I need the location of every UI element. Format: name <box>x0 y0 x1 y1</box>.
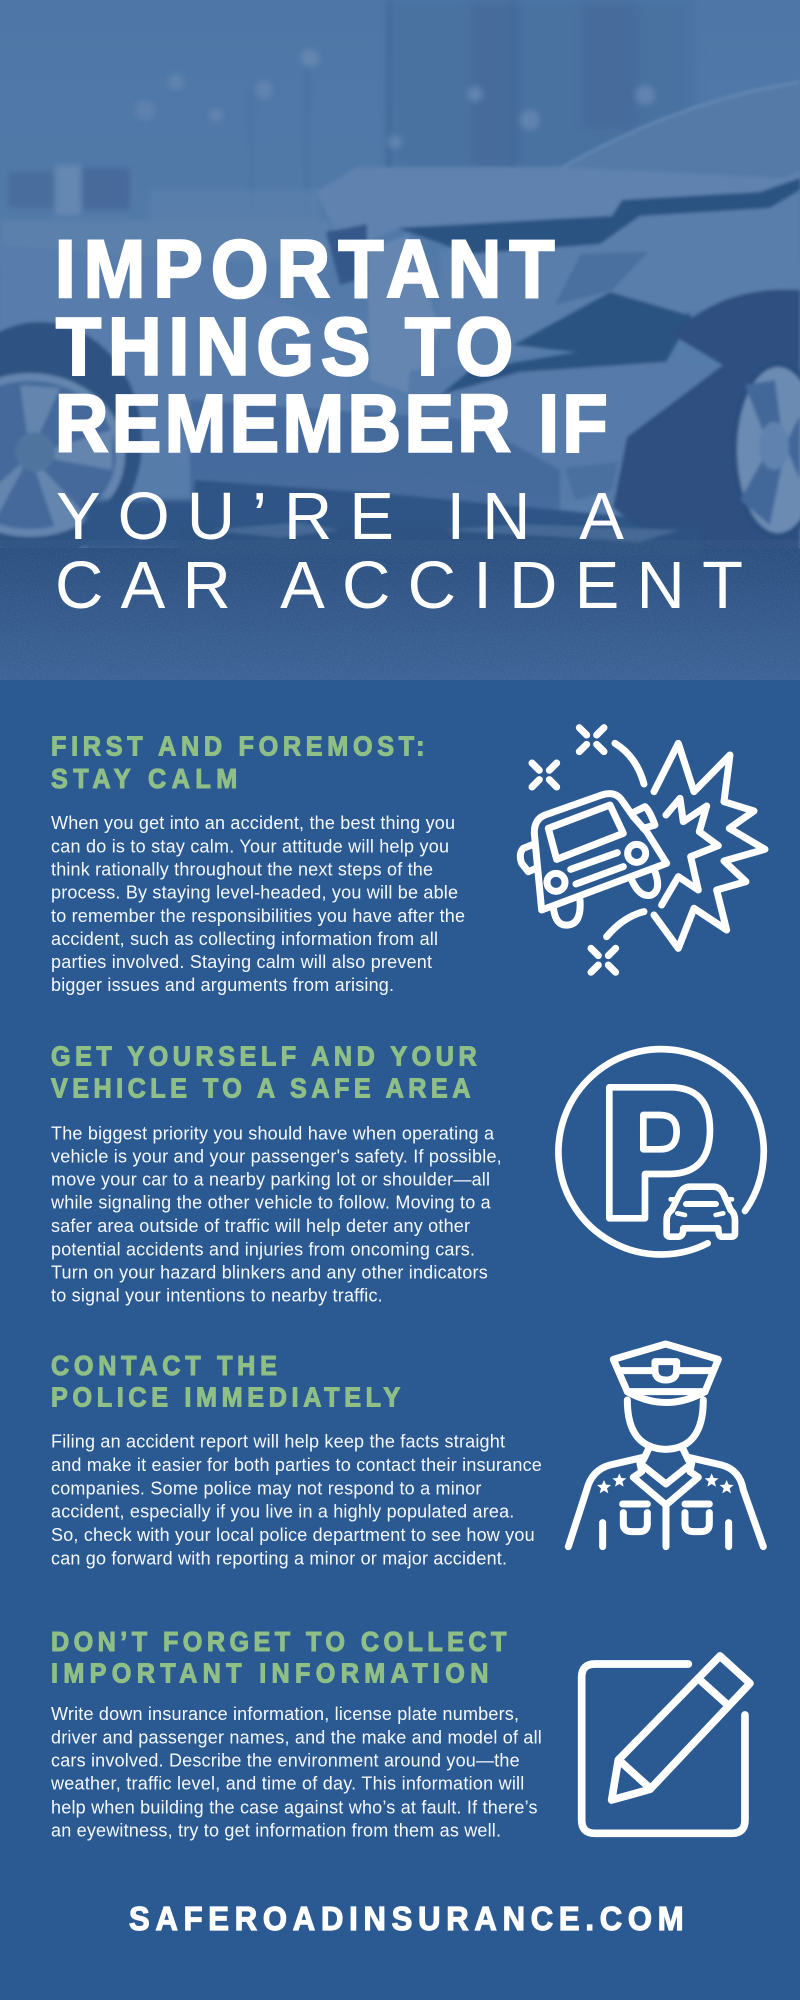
text block: stay calm: When you get into an accident, the best thing you <box>51 813 455 833</box>
right car front body <box>443 207 800 350</box>
text block: safe area: potential accidents and injuries from oncoming cars. <box>51 1239 475 1259</box>
text block: contact the police: accident, especially if you live in a highly populated area. <box>51 1501 514 1521</box>
title: light lines: YOU’RE IN A <box>56 479 624 554</box>
right car dark hood gap <box>398 178 800 254</box>
left car wheel arch and tyre <box>0 322 142 558</box>
heading: stay calm: STAY CALM <box>51 763 237 794</box>
right car wheel arch and tyre <box>613 290 800 572</box>
text block: stay calm: can do is to stay calm. Your attitude will help you <box>51 836 449 856</box>
heading: stay calm: FIRST AND FOREMOST: <box>51 730 425 762</box>
heading: safe area <box>51 1040 477 1104</box>
panel: collect information <box>50 1626 750 1841</box>
icon: police officer <box>568 1344 763 1547</box>
title: bold lines <box>55 222 608 469</box>
text block: contact the police: and make it easier for both parties to contact their insurance <box>51 1455 542 1475</box>
text block: stay calm: parties involved. Staying calm will also prevent <box>51 952 432 972</box>
text block: stay calm: process. By staying level-headed, you will be able <box>51 883 458 903</box>
text block: safe area: The biggest priority you should have when operating a <box>51 1123 495 1143</box>
heading: contact the police: CONTACT THE <box>51 1350 277 1381</box>
title: bold lines: IMPORTANT <box>55 222 555 315</box>
heading: safe area: GET YOURSELF AND YOUR <box>51 1040 477 1072</box>
text block: stay calm: to remember the responsibilities you have after the <box>51 906 465 926</box>
heading: collect information <box>51 1626 506 1689</box>
text block: stay calm: think rationally throughout the next steps of the <box>51 859 433 879</box>
road surface <box>85 500 205 550</box>
text block: collect information: cars involved. Describe the environment around you—the <box>51 1751 520 1771</box>
hero photo: blue-tinted car crash <box>0 0 800 680</box>
panel: safe area <box>50 1040 764 1305</box>
text block: contact the police: So, check with your local police department to see how you <box>51 1525 535 1545</box>
icon: car crash <box>520 728 765 972</box>
heading: contact the police: POLICE IMMEDIATELY <box>51 1381 400 1413</box>
heading: contact the police <box>51 1350 400 1413</box>
left car hood and body <box>3 320 132 384</box>
text block: contact the police: companies. Some police may not respond to a minor <box>51 1478 481 1498</box>
icon: pencil on notepad <box>582 1656 750 1833</box>
title: bold lines: THINGS TO <box>56 300 513 392</box>
icon: parking sign with car <box>558 1049 764 1254</box>
heading: safe area: VEHICLE TO A SAFE AREA <box>51 1072 470 1104</box>
text block: safe area: vehicle is your and your passenger's safety. If possible, <box>51 1146 502 1166</box>
text block: collect information: weather, traffic level, and time of day. This information will <box>50 1774 524 1794</box>
title: light lines <box>55 479 743 623</box>
heading: collect information: DON’T FORGET TO COLLECT <box>51 1626 506 1657</box>
text block: collect information: help when building the case against who’s at fault. If there’s <box>51 1797 538 1817</box>
text block: stay calm: accident, such as collecting information from all <box>51 929 438 949</box>
footer: website: SAFEROADINSURANCE.COM <box>129 1900 684 1937</box>
text block: safe area: safer area outside of traffic will help deter any other <box>51 1216 470 1236</box>
text block: collect information: driver and passenger names, and the make and model of all <box>51 1727 542 1747</box>
text block: safe area: to signal your intentions to nearby traffic. <box>51 1285 383 1305</box>
right car hood <box>319 166 799 240</box>
hero banner with car crash photo and title <box>0 0 800 680</box>
text block: stay calm: bigger issues and arguments from arising. <box>51 975 394 995</box>
text block: collect information <box>50 1704 542 1841</box>
title: light lines: CAR ACCIDENT <box>55 548 743 623</box>
text block: contact the police: can go forward with reporting a minor or major accident. <box>51 1548 507 1568</box>
title: bold lines: REMEMBER IF <box>55 377 608 469</box>
headlight <box>555 252 648 305</box>
text block: collect information: Write down insurance information, license plate numbers, <box>51 1704 519 1724</box>
text block: contact the police: Filing an accident report will help keep the facts straight <box>51 1432 505 1452</box>
text block: safe area <box>50 1123 502 1305</box>
text block: safe area: move your car to a nearby parking lot or shoulder—all <box>51 1169 490 1189</box>
text block: contact the police <box>51 1432 542 1568</box>
panel: contact the police <box>51 1344 763 1568</box>
heading: collect information: IMPORTANT INFORMATION <box>51 1657 488 1689</box>
text block: safe area: Turn on your hazard blinkers and any other indicators <box>51 1262 488 1282</box>
panel: stay calm <box>51 728 765 995</box>
right car windshield <box>571 112 696 170</box>
text block: safe area: while signaling the other vehicle to follow. Moving to a <box>50 1193 492 1213</box>
text block: stay calm <box>51 813 465 995</box>
text block: collect information: an eyewitness, try to get information from them as well. <box>51 1821 501 1841</box>
heading: stay calm <box>51 730 424 794</box>
lower bumper <box>409 370 418 386</box>
